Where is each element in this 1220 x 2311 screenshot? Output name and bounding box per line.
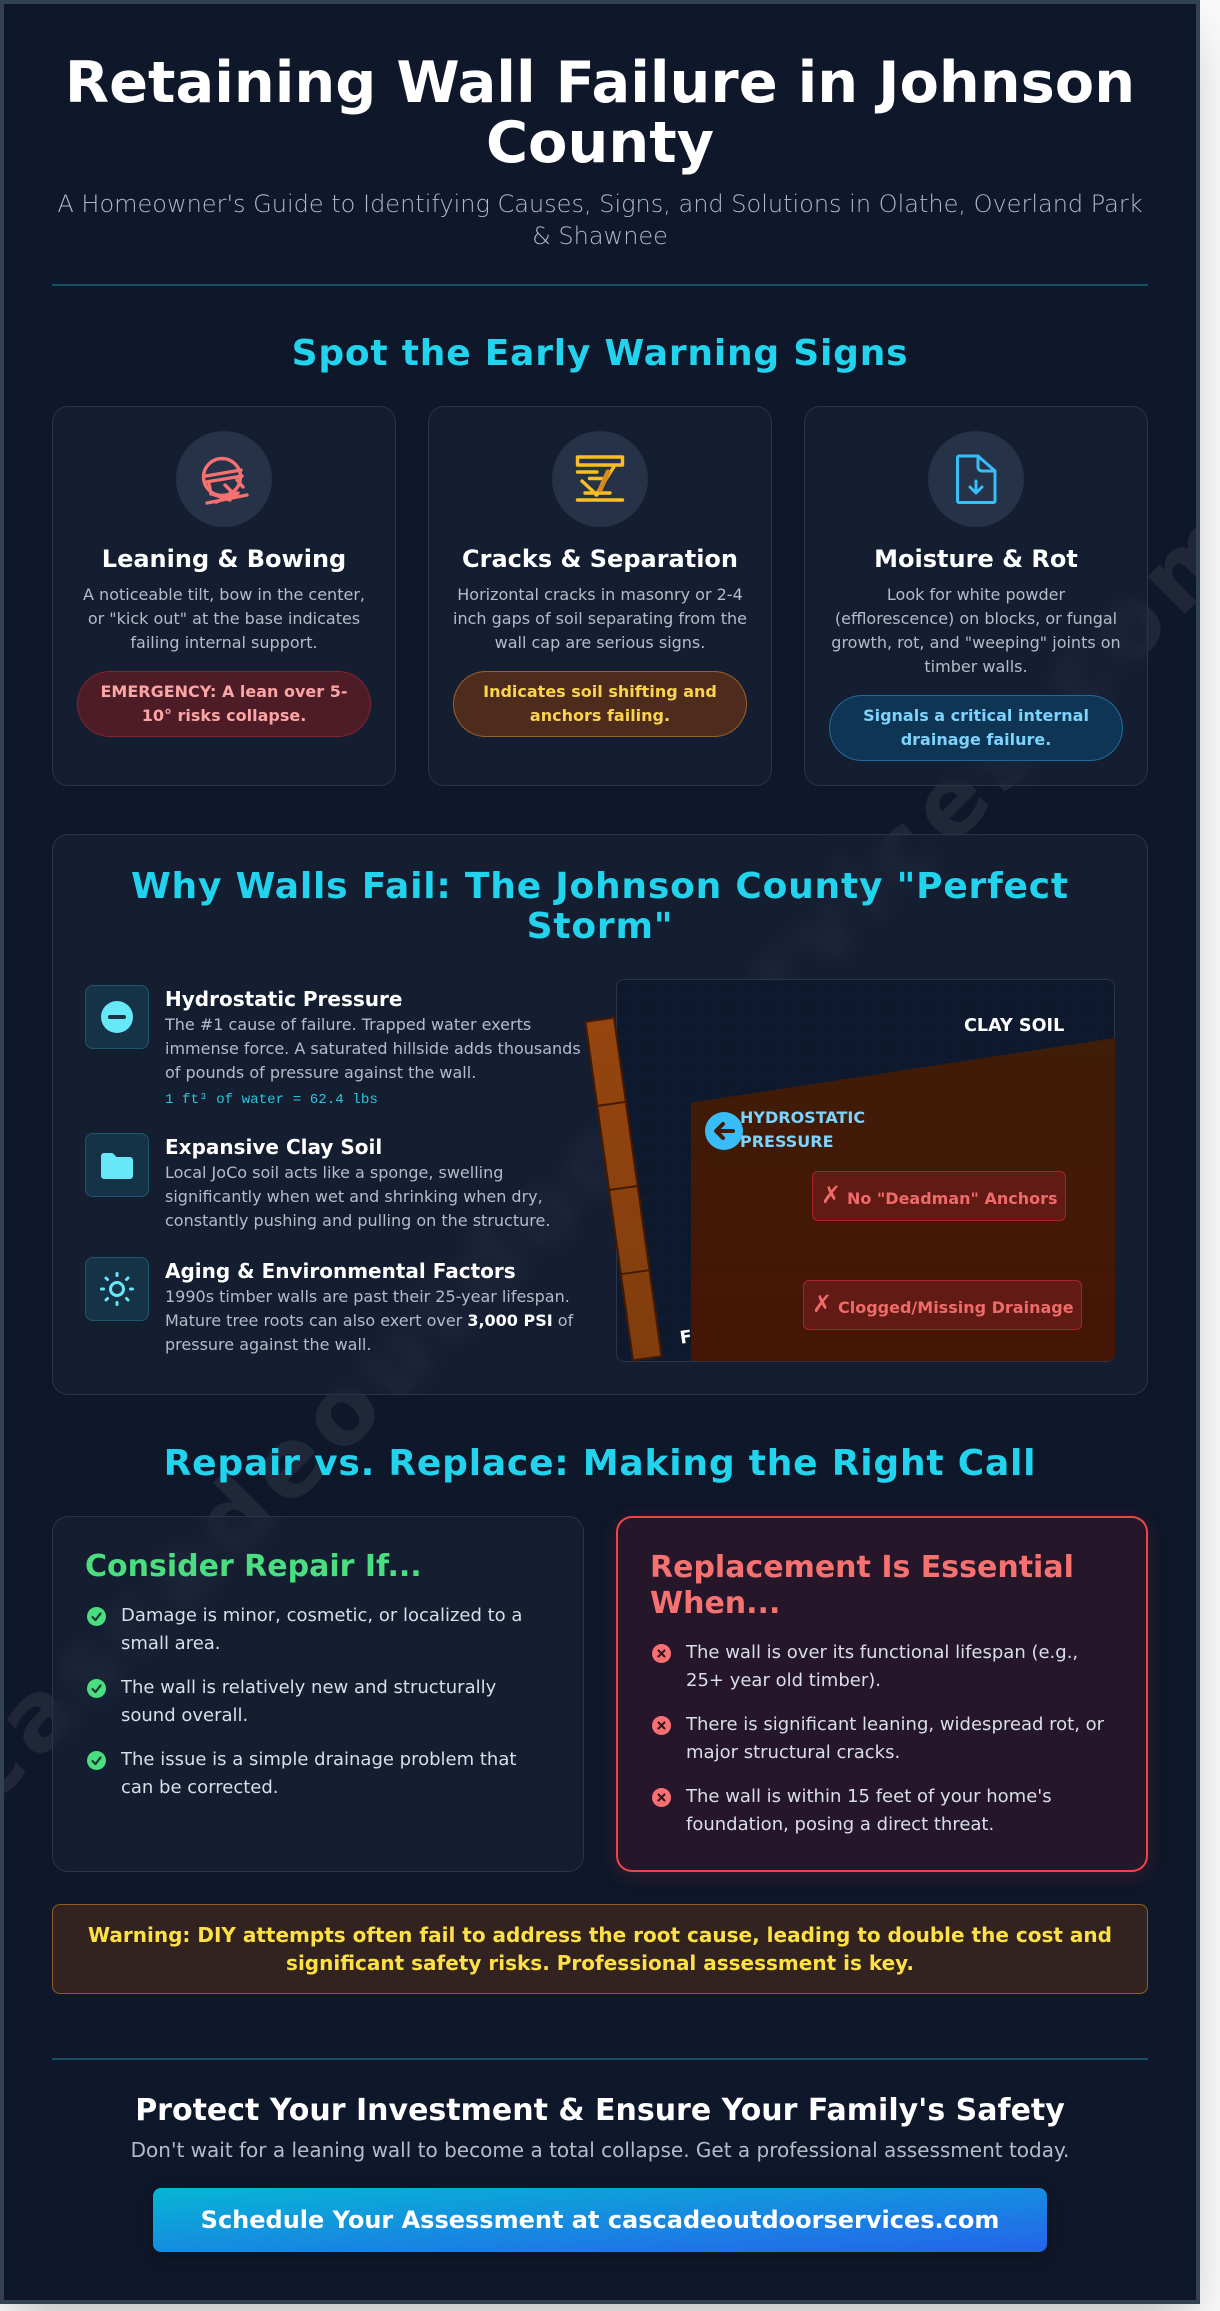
list item [87, 1605, 522, 1654]
callout: clogged drainage: Clogged/Missing Drainage [838, 1298, 1074, 1317]
description [83, 585, 365, 652]
heading: Storm" [527, 906, 673, 947]
icon: cross [652, 1788, 671, 1807]
title [65, 49, 1135, 176]
panel: consider repair [52, 1516, 584, 1872]
list item [87, 1749, 516, 1798]
panel: moisture and rot [804, 406, 1148, 786]
cause text: Mature tree roots can also exert over 3,000 PSI of [165, 1311, 573, 1330]
list item: The issue is a simple drainage problem that [121, 1749, 516, 1770]
label: hydrostatic pressure: PRESSURE [740, 1132, 834, 1151]
description [831, 585, 1121, 676]
cause text: pressure against the wall. [165, 1335, 371, 1354]
list item: The wall is within 15 feet of your home's [686, 1786, 1052, 1807]
heading [131, 866, 1069, 947]
description: wall cap are serious signs. [495, 633, 705, 652]
heading: Cracks & Separation [462, 545, 738, 573]
footing label: F [679, 1327, 693, 1349]
callout: soil shifting: anchors failing. [530, 706, 670, 725]
description: failing internal support. [130, 633, 318, 652]
list item: small area. [121, 1633, 221, 1654]
list item [87, 1677, 496, 1726]
callout: drainage failure: Signals a critical internal [863, 706, 1089, 725]
subtitle: & Shawnee [532, 222, 668, 250]
list item: can be corrected. [121, 1777, 279, 1798]
cause: expansive clay soil: Expansive Clay Soil [165, 1135, 382, 1159]
list item: sound overall. [121, 1705, 248, 1726]
icon: hydrostatic pressure [85, 985, 149, 1049]
callout: drainage failure: drainage failure. [901, 730, 1051, 749]
cause: aging and environmental: Aging & Environmental Factors [165, 1259, 516, 1283]
heading [650, 1550, 1074, 1621]
cause: hydrostatic pressure: Hydrostatic Pressure [165, 987, 402, 1011]
description: growth, rot, and "weeping" joints on [831, 633, 1121, 652]
list item: Damage is minor, cosmetic, or localized to a [121, 1605, 522, 1626]
list item: foundation, posing a direct threat. [686, 1814, 994, 1835]
formula: 1 ft³ of water = 62.4 lbs [165, 1092, 378, 1108]
button: schedule assessment: Schedule Your Assessment at cascadeoutdoorservices.com [201, 2206, 999, 2234]
list item: major structural cracks. [686, 1742, 900, 1763]
icon: cross [652, 1716, 671, 1735]
heading: Replacement Is Essential [650, 1550, 1074, 1585]
cause text: of pounds of pressure against the wall. [165, 1063, 476, 1082]
callout: emergency [77, 671, 371, 737]
description: (efflorescence) on blocks, or fungal [835, 609, 1117, 628]
cause text: The #1 cause of failure. Trapped water exerts [165, 1015, 531, 1034]
heading: When... [650, 1586, 780, 1621]
heading: early warning signs: Spot the Early Warning Signs [292, 333, 908, 374]
callout: clogged drainage [803, 1280, 1082, 1330]
icon: check [87, 1607, 106, 1626]
label: hydrostatic pressure: HYDROSTATIC [740, 1108, 865, 1127]
heading: protect your investment: Protect Your Investment & Ensure Your Family's Safety [135, 2093, 1065, 2128]
icon: check [87, 1751, 106, 1770]
cause text [165, 1163, 550, 1230]
heading: Leaning & Bowing [102, 545, 346, 573]
soil mass [691, 1038, 1115, 1361]
description: Look for white powder [887, 585, 1065, 604]
description: inch gaps of soil separating from the [453, 609, 747, 628]
list item: There is significant leaning, widespread rot, or [686, 1714, 1104, 1735]
title: County [486, 109, 714, 176]
list item [652, 1714, 1104, 1763]
panel: cracks and separation [428, 406, 772, 786]
heading: Why Walls Fail: The Johnson County "Perfect [131, 866, 1069, 907]
panel: leaning and bowing [52, 406, 396, 786]
callout: emergency: EMERGENCY: A lean over 5- [100, 682, 348, 701]
callout: no deadman anchors: No "Deadman" Anchors [847, 1189, 1058, 1208]
callout: clogged drainage: ✗ [812, 1290, 832, 1318]
subtitle [57, 190, 1143, 250]
cause text: significantly when wet and shrinking when dry, [165, 1187, 543, 1206]
label: clay soil: CLAY SOIL [964, 1016, 1064, 1036]
icon: cross [652, 1644, 671, 1663]
cause text: 1990s timber walls are past their 25-year lifespan. [165, 1287, 570, 1306]
description: A noticeable tilt, bow in the center, [83, 585, 365, 604]
callout: emergency: 10° risks collapse. [142, 706, 306, 725]
text: call to action: Don't wait for a leaning wall to become a total collapse. Get a professional assessment today. [131, 2138, 1069, 2162]
callout: diy warning: significant safety risks. Professional assessment is key. [286, 1951, 914, 1975]
description [453, 585, 747, 652]
cause text: constantly pushing and pulling on the structure. [165, 1211, 550, 1230]
callout: soil shifting: Indicates soil shifting and [483, 682, 717, 701]
description: timber walls. [924, 657, 1028, 676]
description: Horizontal cracks in masonry or 2-4 [457, 585, 743, 604]
callout: no deadman anchors [812, 1171, 1066, 1221]
callout: drainage failure [829, 695, 1123, 761]
panel: replacement essential [616, 1516, 1148, 1872]
icon: pressure arrow [705, 1112, 743, 1150]
title: Retaining Wall Failure in Johnson [65, 49, 1135, 116]
callout: diy warning [52, 1904, 1148, 1994]
icon: clay soil [85, 1133, 149, 1197]
icon: cracked wall [552, 431, 648, 527]
icon: aging environmental [85, 1257, 149, 1321]
cause text [165, 1287, 574, 1354]
cause text [164, 1015, 581, 1082]
cause text: Local JoCo soil acts like a sponge, swelling [165, 1163, 503, 1182]
icon: document with down arrow [928, 431, 1024, 527]
description: or "kick out" at the base indicates [88, 609, 360, 628]
callout: no deadman anchors: ✗ [821, 1181, 841, 1209]
list item [652, 1786, 1052, 1835]
diagram: failing retaining wall [616, 979, 1115, 1362]
icon: leaning wall [176, 431, 272, 527]
list item: The wall is over its functional lifespan (e.g., [686, 1642, 1078, 1663]
heading: Moisture & Rot [874, 545, 1078, 573]
subtitle: A Homeowner's Guide to Identifying Causes, Signs, and Solutions in Olathe, Overland Park [57, 190, 1143, 218]
list item: 25+ year old timber). [686, 1670, 881, 1691]
list item: The wall is relatively new and structurally [121, 1677, 496, 1698]
leaning wall [584, 1017, 663, 1361]
cause text: immense force. A saturated hillside adds thousands [165, 1039, 581, 1058]
callout: soil shifting [453, 671, 747, 737]
list item [652, 1642, 1078, 1691]
button: schedule assessment [153, 2188, 1047, 2252]
heading: repair vs replace: Repair vs. Replace: Making the Right Call [164, 1443, 1036, 1484]
heading: Consider Repair If... [85, 1549, 422, 1584]
icon: check [87, 1679, 106, 1698]
label: hydrostatic pressure [740, 1108, 865, 1151]
panel: why walls fail [52, 834, 1148, 1395]
callout: diy warning: Warning: DIY attempts often fail to address the root cause, leading to double the cost and [88, 1923, 1112, 1947]
